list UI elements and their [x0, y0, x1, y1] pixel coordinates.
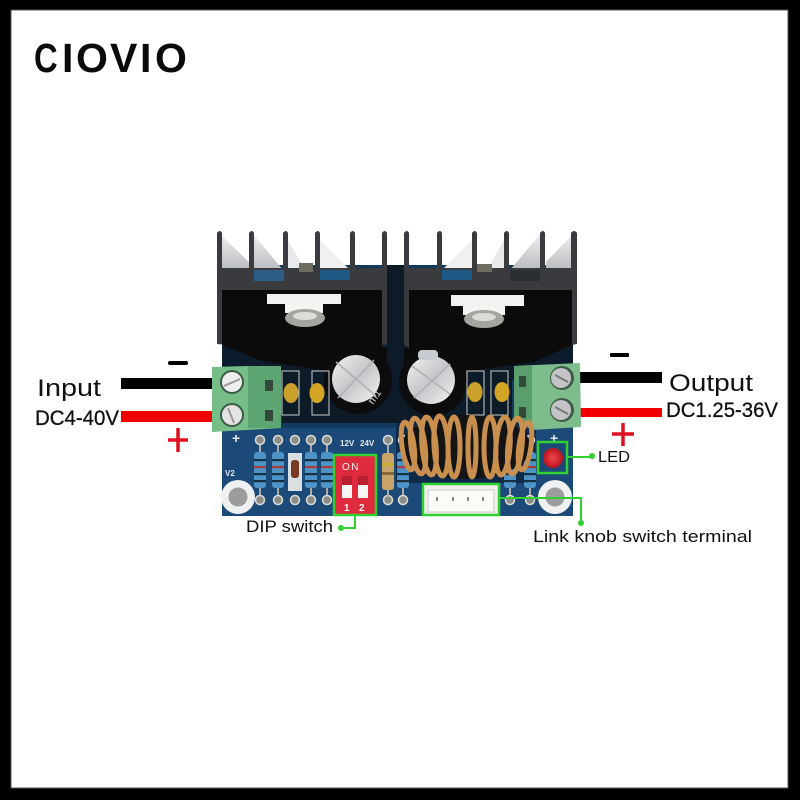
resistors and diode row — [254, 436, 536, 504]
label: DIP switch: DIP switch — [246, 517, 333, 536]
brand logo: V — [110, 35, 138, 81]
mounting holes — [221, 480, 572, 514]
output terminal block — [514, 363, 581, 430]
small yellow capacitors — [282, 371, 510, 415]
brand logo: O — [76, 35, 108, 81]
LED — [538, 442, 567, 473]
circuit board — [222, 265, 573, 516]
brand logo: I — [62, 35, 73, 81]
leader lines — [339, 454, 594, 530]
knob switch connector — [422, 483, 500, 516]
circuit board: V2 — [225, 469, 235, 478]
label: knob terminal: Link knob switch terminal — [533, 527, 752, 546]
label: input voltage: DC4-40V — [35, 407, 119, 430]
DIP switch: 2 — [359, 503, 365, 514]
brand logo — [34, 34, 187, 81]
circuit board: + — [232, 430, 240, 446]
output wires — [579, 353, 662, 446]
left heatsink — [217, 231, 387, 380]
label: Input: Input — [37, 375, 101, 402]
DIP switch — [334, 455, 376, 515]
circuit board: 24V — [360, 439, 375, 448]
DIP switch: ON — [342, 462, 360, 473]
left capacitor: m1 — [366, 387, 384, 407]
circuit board: + — [550, 430, 558, 446]
toroidal inductor — [399, 415, 534, 479]
right heatsink — [404, 231, 577, 378]
right capacitor — [399, 348, 467, 416]
circuit board: 12V — [340, 439, 355, 448]
label: Output: Output — [669, 370, 753, 397]
brand logo: C — [34, 34, 58, 81]
label: LED: LED — [598, 449, 630, 466]
input terminal block — [212, 366, 281, 432]
input wires — [121, 361, 212, 452]
brand logo: I — [140, 35, 151, 81]
brand logo: O — [155, 35, 187, 81]
label: output voltage: DC1.25-36V — [666, 399, 778, 422]
DIP switch: 1 — [344, 503, 350, 514]
left capacitor — [324, 346, 392, 414]
